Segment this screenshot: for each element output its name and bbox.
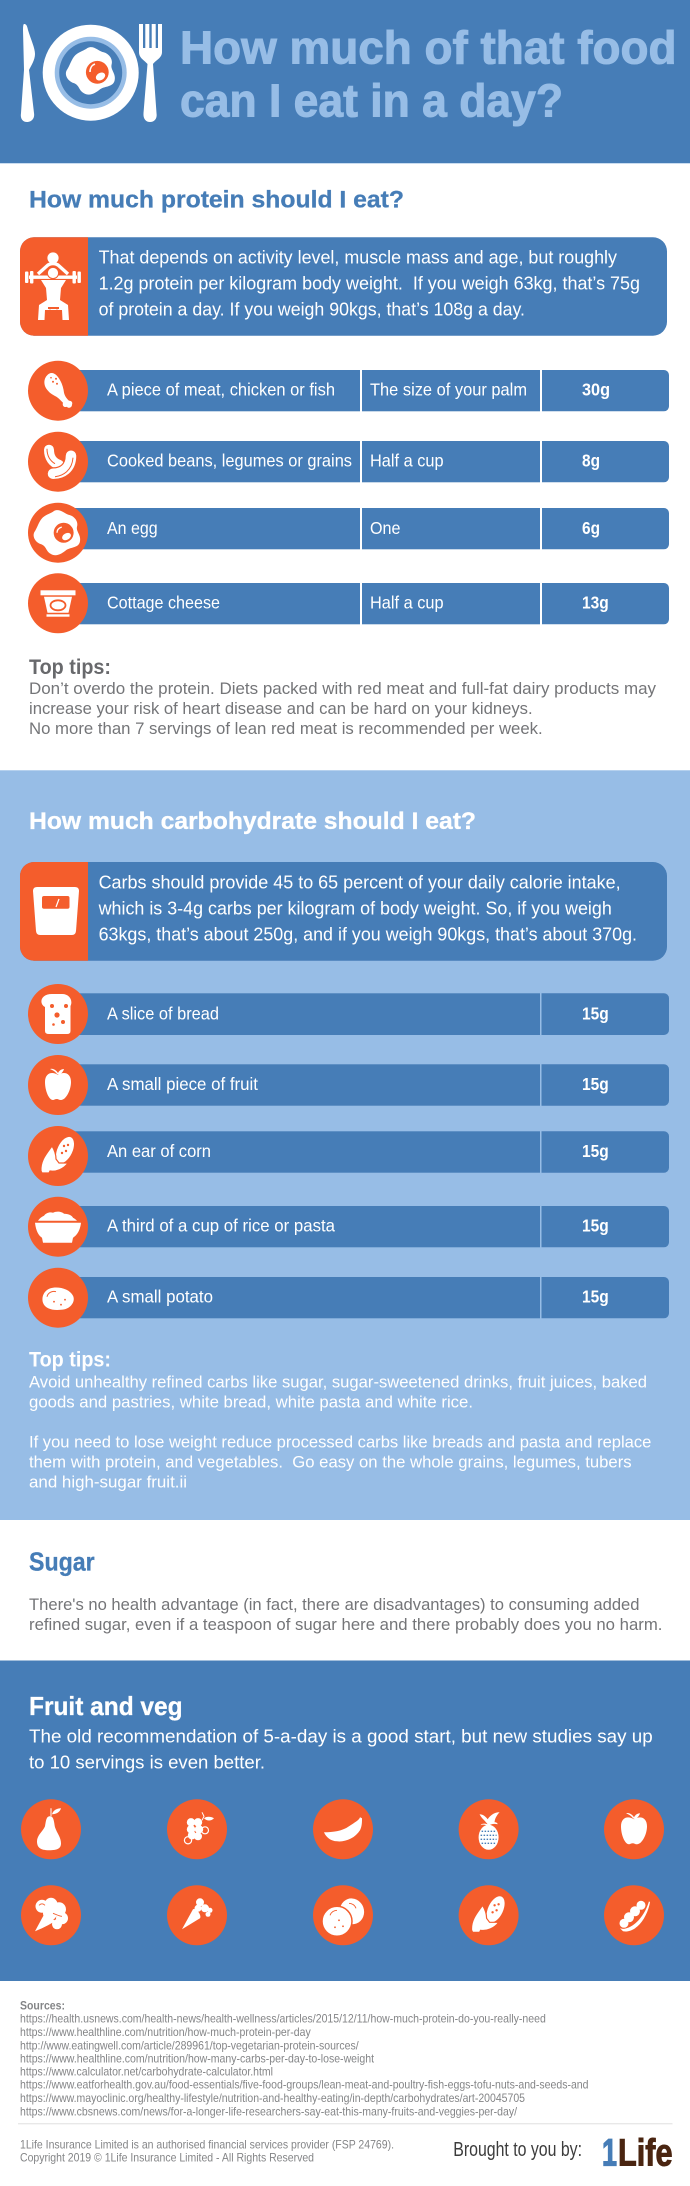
heading: fruit and veg: Fruit and veg	[29, 1691, 183, 1721]
title: can I eat in a day?	[180, 75, 563, 127]
panel: sources	[18, 1998, 672, 2175]
row: egg	[28, 503, 669, 563]
text block: carbohydrate top tips: If you need to lose weight reduce processed carbs like breads and pasta and replace	[29, 1432, 651, 1451]
icon: apple	[45, 1069, 71, 1100]
text block: protein top tips: increase your risk of heart disease and can be hard on your kidneys.	[29, 699, 533, 718]
heading: protein: How much protein should I eat?	[29, 186, 404, 213]
row: rice or pasta	[28, 1197, 669, 1257]
brought to you by: Brought to you by:	[453, 2139, 582, 2161]
icon: fork	[139, 24, 162, 122]
callout text: of protein a day. If you weigh 90kgs, that’s 108g a day.	[99, 299, 525, 320]
icon: pear	[21, 1799, 81, 1859]
icon: cottage cheese tub	[40, 590, 76, 617]
callout text	[99, 246, 640, 320]
sources list: https://www.calculator.net/carbohydrate-calculator.html	[20, 2064, 273, 2078]
callout text	[98, 871, 637, 945]
panel: sugar	[29, 1547, 662, 1634]
title: How much of that food	[180, 21, 676, 73]
row: meat: 30g	[582, 380, 610, 400]
text block: carbohydrate top tips: goods and pastries, white bread, white pasta and white rice.	[29, 1392, 473, 1411]
row: bread: A slice of bread	[107, 1003, 219, 1023]
callout: protein requirement	[20, 237, 667, 336]
sources list: https://health.usnews.com/health-news/health-wellness/articles/2015/12/11/how-much-protein-do-you-really-need	[20, 2012, 546, 2026]
text block: carbohydrate top tips: Top tips:	[29, 1349, 111, 1372]
logo: 1Life: 1	[602, 2133, 617, 2175]
text block: protein top tips: Top tips:	[29, 656, 111, 679]
row: corn: An ear of corn	[107, 1141, 211, 1161]
sources list: https://www.eatforhealth.gov.au/food-essentials/five-food-groups/lean-meat-and-poultry-fish-eggs-tofu-nuts-and-seeds-and	[20, 2078, 588, 2092]
icon: plate with fried egg	[43, 25, 139, 121]
text block: carbohydrate top tips	[29, 1349, 651, 1491]
row: cottage cheese: Half a cup	[370, 593, 444, 613]
heading: carbohydrate: How much carbohydrate should I eat?	[29, 808, 476, 835]
callout text: 63kgs, that’s about 250g, and if you weigh 90kgs, that’s about 370g.	[99, 924, 637, 945]
icon: corn	[459, 1885, 519, 1945]
row: cottage cheese	[28, 573, 669, 633]
sources list: https://www.healthline.com/nutrition/how-much-protein-per-day	[20, 2025, 311, 2039]
icon: carrot	[167, 1885, 227, 1945]
footer legal text: 1Life Insurance Limited is an authorised financial services provider (FSP 24769).	[20, 2137, 394, 2151]
logo: 1Life: Life	[618, 2133, 672, 2175]
logo: 1Life	[602, 2133, 672, 2175]
row: beans: Half a cup	[370, 451, 444, 471]
text block: fruit and veg: to 10 servings is even better.	[29, 1751, 265, 1772]
sources list	[20, 2012, 588, 2118]
text block: carbohydrate top tips: and high-sugar fruit.ii	[29, 1472, 187, 1491]
row: corn: 15g	[582, 1141, 609, 1161]
row: corn	[28, 1126, 669, 1186]
icon: knife	[21, 24, 35, 122]
icon: potatoes	[313, 1885, 373, 1945]
icon: pineapple	[459, 1799, 519, 1859]
text block: sugar: There's no health advantage (in fact, there are disadvantages) to consuming added	[29, 1595, 640, 1614]
icon: beans	[47, 449, 73, 477]
row: beans: 8g	[582, 451, 600, 471]
row: rice or pasta: 15g	[582, 1216, 609, 1236]
row: fruit: 15g	[582, 1074, 609, 1094]
icon: chicken drumstick	[44, 373, 72, 408]
row: meat: The size of your palm	[370, 380, 527, 400]
icon: grapes	[167, 1799, 227, 1859]
icon: apple	[604, 1799, 664, 1859]
panel: header	[0, 0, 690, 164]
icon: rice bowl	[35, 1212, 81, 1243]
icon: bread slice	[41, 994, 71, 1034]
row: beans: Cooked beans, legumes or grains	[107, 451, 352, 471]
panel: carbohydrate	[0, 770, 690, 1520]
row: egg: An egg	[107, 518, 158, 538]
panel: fruit and veg	[0, 1660, 690, 1981]
text block: protein top tips	[29, 656, 656, 738]
callout text: which is 3-4g carbs per kilogram of body weight. So, if you weigh	[98, 897, 612, 918]
sources list: https://www.healthline.com/nutrition/how-many-carbs-per-day-to-lose-weight	[20, 2052, 375, 2066]
icon: banana	[313, 1799, 373, 1859]
text block: fruit and veg: The old recommendation of 5-a-day is a good start, but new studies say up	[29, 1725, 653, 1746]
sources list: https://www.mayoclinic.org/healthy-lifestyle/nutrition-and-healthy-eating/in-depth/carbohydrates/art-20045705	[20, 2091, 525, 2105]
panel: protein	[20, 186, 669, 738]
row: bread	[28, 984, 669, 1044]
icon: pea pod	[604, 1885, 664, 1945]
row: fruit: A small piece of fruit	[107, 1074, 258, 1094]
sources list: https://www.cbsnews.com/news/for-a-longer-life-researchers-say-eat-this-many-fruits-and-veggies-per-day/	[20, 2104, 518, 2118]
callout text: Carbs should provide 45 to 65 percent of your daily calorie intake,	[99, 871, 621, 892]
row: rice or pasta: A third of a cup of rice or pasta	[107, 1216, 335, 1236]
text block: carbohydrate top tips: them with protein, and vegetables. Go easy on the whole grains, legumes, tubers	[29, 1452, 632, 1471]
row: egg: One	[370, 518, 400, 538]
row: fruit	[28, 1055, 669, 1115]
icon: weightlifter	[25, 252, 81, 320]
sources list: http://www.eatingwell.com/article/289961/top-vegetarian-protein-sources/	[20, 2038, 359, 2052]
row: cottage cheese: 13g	[582, 593, 609, 613]
row: potato: 15g	[582, 1286, 609, 1306]
footer legal text	[20, 2137, 394, 2165]
row: egg: 6g	[582, 518, 600, 538]
callout text: That depends on activity level, muscle mass and age, but roughly	[99, 246, 618, 267]
text block: protein top tips: No more than 7 servings of lean red meat is recommended per week.	[29, 719, 543, 738]
text block: carbohydrate top tips: Avoid unhealthy refined carbs like sugar, sugar-sweetened drinks, fruit juices, baked	[29, 1372, 647, 1391]
row: meat	[28, 361, 669, 421]
icon: fried egg	[34, 510, 80, 555]
icon: potato	[42, 1288, 74, 1310]
text block: sugar: refined sugar, even if a teaspoon of sugar here and there probably does you no harm.	[29, 1615, 662, 1634]
text block: sugar	[29, 1595, 662, 1634]
row: potato	[28, 1268, 669, 1328]
row: meat: A piece of meat, chicken or fish	[107, 380, 335, 400]
icon: corn	[41, 1134, 78, 1173]
text block: protein top tips: Don’t overdo the protein. Diets packed with red meat and full-fat dairy products may	[29, 679, 656, 698]
row: potato: A small potato	[107, 1286, 213, 1306]
row: cottage cheese: Cottage cheese	[107, 593, 220, 613]
callout text: 1.2g protein per kilogram body weight. If you weigh 63kg, that’s 75g	[99, 272, 640, 293]
sources heading: Sources:	[20, 1998, 65, 2012]
heading: sugar: Sugar	[29, 1547, 95, 1577]
footer legal text: Copyright 2019 © 1Life Insurance Limited - All Rights Reserved	[20, 2151, 314, 2165]
text block: fruit and veg	[29, 1725, 653, 1772]
icon: broccoli	[21, 1885, 81, 1945]
row: beans	[28, 432, 669, 492]
title	[180, 21, 676, 127]
row: bread: 15g	[582, 1003, 609, 1023]
icon: bathroom scale	[33, 887, 79, 935]
callout: carbohydrate requirement	[20, 862, 667, 961]
